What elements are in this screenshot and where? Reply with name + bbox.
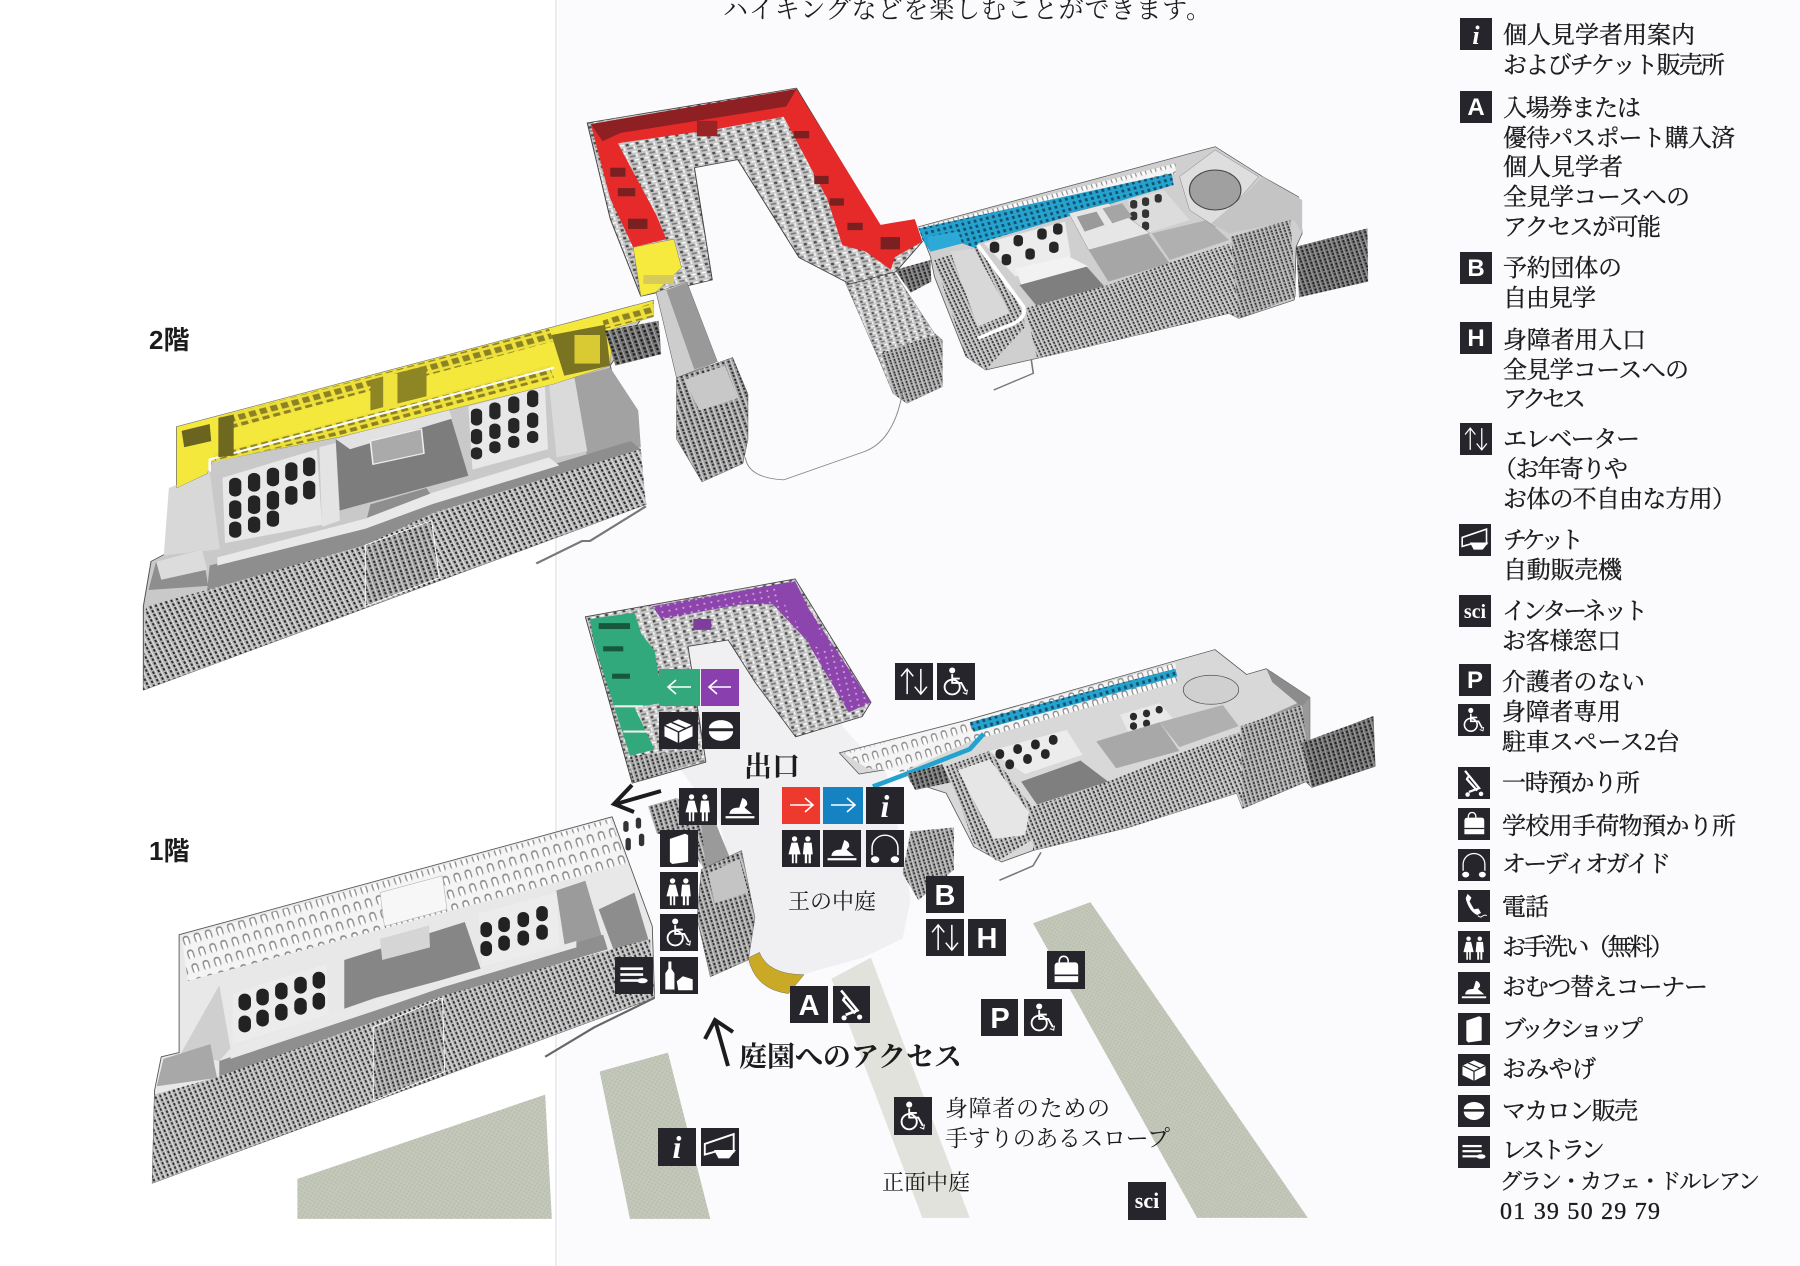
legend: internet desk [1459,595,1648,655]
label: front court: 正面中庭 [882,1170,970,1195]
label: accessible ramp: 手すりのあるスロープ [945,1126,1170,1151]
legend: baby changing [1458,972,1708,1004]
legend: parking: P [1467,667,1483,694]
icon: blue route arrow [823,787,863,824]
icon: information [866,787,904,824]
legend: parking: 介護者のない [1502,669,1645,696]
icon: audio guide [866,830,904,867]
legend: toilets: お手洗い（無料） [1502,934,1674,961]
legend: elevator: （お年寄りや [1493,456,1628,483]
icon: ticket machine forecourt [701,1128,739,1166]
label: accessible ramp: 身障者のための [945,1096,1110,1121]
icon: toilets near exit [679,788,717,825]
legend: parking: 身障者専用 [1502,699,1621,726]
legend: telephone: 電話 [1502,894,1549,921]
icon: information: i [881,788,890,824]
icon: baby changing centre [823,830,861,867]
icon: parking: P [990,1003,1010,1035]
legend: elevator [1460,423,1736,513]
icon: toilets centre [782,830,820,867]
first floor north wing with green and purple routes [585,579,871,783]
legend: elevator: エレベーター [1503,427,1640,453]
legend: ticket machine: 自動販売機 [1503,557,1623,584]
second floor west wing with yellow route [143,300,661,690]
legend: entrance A: 入場券または [1503,95,1641,122]
icon: information forecourt: i [673,1129,682,1165]
icon: refreshments [660,957,698,994]
heading: second floor: 2階 [149,325,189,355]
legend: entrance B: 自由見学 [1503,285,1596,312]
icon: entrance A: A [799,990,820,1022]
legend: bookshop: ブックショップ [1502,1017,1643,1043]
legend: entrance H: 身障者用入口 [1503,327,1646,354]
legend: entrance A: 全見学コースへの [1503,184,1690,211]
second floor north wing with red route [587,88,922,482]
heading: first floor: 1階 [149,836,189,866]
legend: restaurant: レストラン [1502,1138,1605,1164]
legend: school bag storage [1458,808,1736,840]
legend: entrance H: 全見学コースへの [1503,357,1689,384]
second floor east wing with blue route [830,147,1368,403]
icon: entrance A [790,986,828,1023]
legend: information: 個人見学者用案内 [1503,22,1695,49]
legend: entrance H [1460,322,1689,413]
legend: baby changing: おむつ替えコーナー [1502,974,1708,1001]
icon: red route arrow [782,787,820,824]
legend: entrance H: アクセス [1503,387,1586,413]
icon: wheelchair west [660,914,698,951]
icon: internet desk: sci [1135,1188,1159,1213]
icon: school bag storage [1047,951,1085,989]
icon: purple route arrow [701,669,739,706]
icon: internet desk [1128,1182,1166,1220]
icon: entrance H [968,919,1006,956]
label: king's court: 王の中庭 [788,889,876,914]
icon: information forecourt [658,1128,696,1166]
legend: entrance A: 優待パスポート購入済 [1503,125,1735,152]
legend: entrance A: アクセスが可能 [1503,214,1661,241]
legend: telephone [1458,890,1549,922]
icon: wheelchair north [937,663,975,700]
legend [1458,18,1760,1225]
legend: entrance A: A [1467,94,1485,121]
label: garden access: 庭園へのアクセス [739,1041,962,1073]
legend: macaron sales: マカロン販売 [1502,1098,1638,1125]
legend: restaurant: 01 39 50 29 79 [1500,1199,1660,1225]
map icons around the first floor plan [615,663,1166,1220]
icon: elevator east [926,919,964,956]
legend: entrance B [1460,252,1622,312]
legend: bookshop [1458,1013,1643,1045]
icon: bookshop [660,830,698,867]
legend: entrance B: B [1467,255,1485,282]
icon: stroller storage [833,986,870,1023]
arrow: exit [614,785,661,812]
icon: entrance H: H [977,923,997,955]
icon: wheelchair ramp [894,1097,932,1135]
legend: stroller storage [1458,767,1640,799]
legend: internet desk: インターネット [1502,599,1648,625]
first floor central pavilions and gold ring [623,798,804,994]
icon: parking [981,999,1018,1036]
legend: audio guide: オーディオガイド [1502,852,1671,878]
legend: restaurant [1458,1136,1760,1225]
first floor east wing with blue route [839,650,1375,900]
legend: elevator: お体の不自由な方用） [1503,486,1736,513]
legend: entrance H: H [1467,325,1485,352]
icon: macaron sales [702,712,740,749]
legend: audio guide [1458,849,1671,881]
icon: toilets west [660,872,698,909]
icon: green route arrow [659,669,700,706]
legend: entrance A: 個人見学者 [1503,154,1623,181]
legend: ticket machine [1459,524,1623,584]
label: accessible ramp [945,1096,1170,1151]
arrow: garden access [705,1020,733,1066]
legend: information: i [1472,21,1480,50]
legend: restaurant: グラン・カフェ・ドルレアン [1500,1169,1760,1194]
legend: entrance B: 予約団体の [1503,255,1622,282]
legend: internet desk: お客様窓口 [1502,628,1621,655]
legend: school bag storage: 学校用手荷物預かり所 [1502,813,1736,840]
legend: stroller storage: 一時預かり所 [1502,770,1640,797]
legend: internet desk: sci [1464,601,1487,623]
legend: ticket machine: チケット [1503,528,1584,554]
label: exit: 出口 [744,751,800,783]
legend: macaron sales [1458,1095,1638,1127]
legend: gift shop [1458,1054,1596,1086]
legend: parking [1458,664,1680,756]
legend: gift shop: おみやげ [1502,1056,1596,1083]
legend: toilets [1458,931,1674,963]
first floor west wing [152,817,655,1183]
icon: elevator north [895,663,933,700]
first floor courts and paving [297,632,1308,1219]
icon: wheelchair parking [1024,999,1062,1036]
icon: entrance B [926,876,964,913]
legend: entrance A [1460,91,1735,241]
legend: information: およびチケット販売所 [1503,52,1725,79]
legend: information [1460,18,1725,79]
icon: entrance B: B [935,880,955,912]
icon: gift shop [659,712,698,749]
legend: parking: 駐車スペース2台 [1501,729,1680,756]
icon: baby changing near exit [721,788,759,825]
icon: restaurant [615,957,653,994]
